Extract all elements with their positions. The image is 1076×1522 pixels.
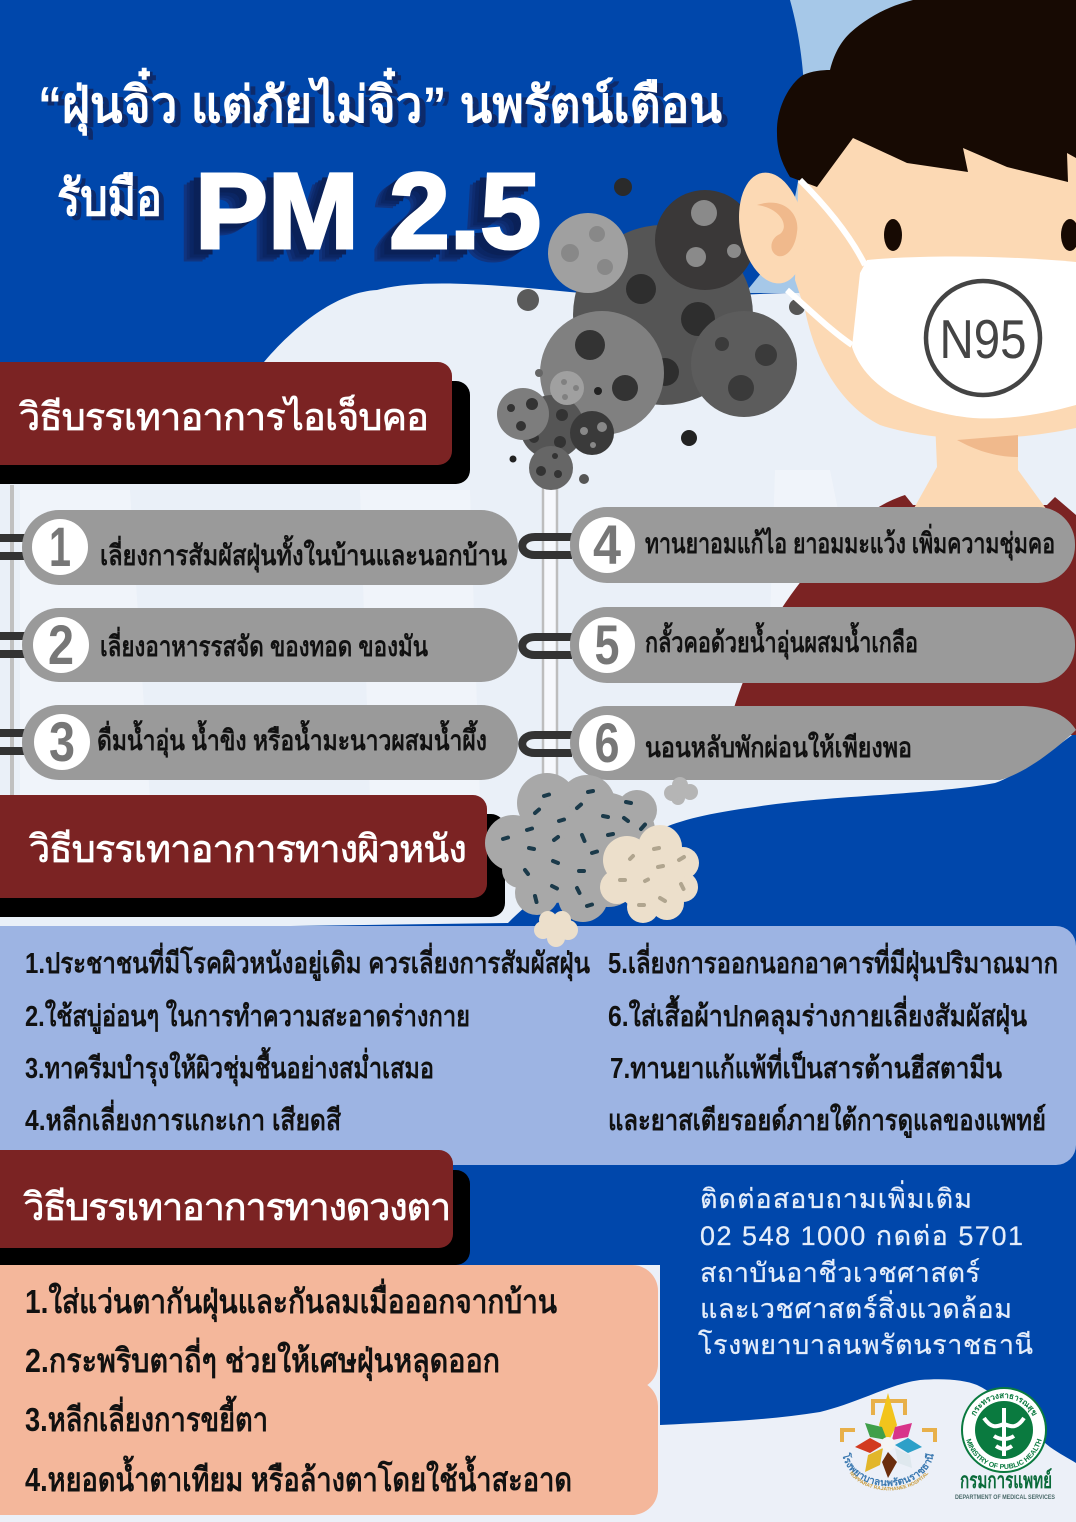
background: pale wave: [0, 284, 1076, 930]
title: “ฝุ่นจิ๋ว แต่ภัยไม่จิ๋ว” นพรัตน์เตือน: [44, 72, 728, 140]
small beige puff: [534, 911, 578, 947]
title: “ฝุ่นจิ๋ว แต่ภัยไม่จิ๋ว” นพรัตน์เตือน: [38, 68, 722, 136]
item 1: [22, 510, 518, 585]
gray dust cloud: [485, 773, 657, 922]
item 6: นอนหลับพักผ่อนให้เพียงพอ: [645, 731, 912, 763]
mask straps: [787, 180, 865, 345]
PM 2.5 heading: PM 2.5: [188, 155, 534, 276]
item 3: ดื่มน้ำอุ่น น้ำขิง หรือน้ำมะนาวผสมน้ำผึ้ง: [97, 719, 487, 758]
PM2.5 dust cluster: [497, 178, 805, 490]
background: blue strip beside third heading: [0, 1160, 680, 1265]
panel: skin symptoms: 4.หลีกเลี่ยงการแกะเกา เสียดสี: [25, 1099, 341, 1137]
face: [795, 130, 1076, 439]
heading: skin symptoms: [0, 795, 505, 917]
item 5: [570, 607, 1075, 683]
panel: eye symptoms: 1.ใส่แว่นตากันฝุ่นและกันลมเมื่อออกจากบ้าน: [25, 1278, 557, 1323]
item 4: 4: [593, 513, 621, 576]
item 1: เลี่ยงการสัมผัสฝุ่นทั้งในบ้านและนอกบ้าน: [100, 534, 507, 573]
PM 2.5 heading: PM 2.5: [184, 158, 530, 279]
background: soft light stripes: [20, 470, 860, 800]
chin shadow: [957, 435, 1018, 457]
person wearing N95 mask: [727, 0, 1076, 735]
binder rings: [0, 537, 572, 753]
item 2: [22, 608, 518, 682]
small gray puff: [664, 777, 698, 805]
contact information: และเวชศาสตร์สิ่งแวดล้อม: [700, 1290, 1012, 1324]
panel: eye symptoms: [0, 1265, 658, 1515]
skin dust clouds: [485, 773, 699, 947]
eyes: [884, 219, 1076, 251]
logo: Ministry of Public Health: MINISTRY OF PUBLIC HEALTH: [966, 1438, 1042, 1469]
panel: eye symptoms: 2.กระพริบตาถี่ๆ ช่วยให้เศษฝุ่นหลุดออก: [25, 1337, 500, 1382]
item 2: เลี่ยงอาหารรสจัด ของทอด ของมัน: [100, 626, 428, 662]
item 6: [570, 706, 1076, 780]
item 5: กลั้วคอด้วยน้ำอุ่นผสมน้ำเกลือ: [645, 621, 918, 660]
logo: Nopparat Rajathanee Hospital: NOPPARAT RAJATHANEE HOSPITAL: [850, 1471, 928, 1490]
logo: Nopparat Rajathanee Hospital: [840, 1393, 937, 1490]
PM 2.5 heading: PM 2.5: [181, 160, 527, 281]
mask: [852, 256, 1076, 418]
contact information: [698, 1180, 1033, 1360]
PM 2.5 heading: PM 2.5: [178, 162, 524, 283]
heading: cough and sore throat: วิธีบรรเทาอาการไอเจ็บคอ: [19, 394, 429, 439]
title: [38, 68, 728, 230]
panel: skin symptoms: 7.ทานยาแก้แพ้ที่เป็นสารต้านฮีสตามีน: [610, 1047, 1002, 1085]
N95 badge: N95: [940, 308, 1026, 370]
background: light blue corner: [745, 0, 1076, 293]
logo: Nopparat Rajathanee Hospital: โรงพยาบาลนพรัตนราชธานี: [842, 1452, 934, 1486]
item 5: 5: [594, 613, 620, 676]
title: รับมือ: [57, 170, 162, 226]
panel: skin symptoms: 2.ใช้สบู่อ่อนๆ ในการทำความสะอาดร่างกาย: [25, 999, 470, 1034]
heading: skin symptoms: วิธีบรรเทาอาการทางผิวหนัง: [29, 829, 467, 871]
PM 2.5 heading: PM 2.5: [195, 150, 541, 271]
item 1: 1: [49, 515, 71, 578]
panel: eye symptoms: 3.หลีกเลี่ยงการขยี้ตา: [25, 1395, 268, 1438]
hair: [777, 0, 1076, 187]
heading: cough and sore throat: [0, 362, 470, 484]
contact information: 02 548 1000 กดต่อ 5701: [700, 1221, 1023, 1251]
neck: [913, 420, 1047, 510]
list: sore throat remedies: [22, 507, 1076, 780]
panel: eye symptoms: 4.หยอดน้ำตาเทียม หรือล้างตาโดยใช้น้ำสะอาด: [25, 1455, 572, 1498]
ear: [731, 167, 813, 289]
item 6: 6: [594, 711, 620, 774]
item 3: 3: [49, 710, 75, 773]
logo: Ministry of Public Health: กระทรวงสาธารณสุข: [972, 1393, 1037, 1416]
title: รับมือ: [62, 174, 167, 230]
logo: Ministry of Public Health: [955, 1387, 1055, 1501]
item 2: 2: [48, 613, 74, 676]
shirt: [727, 495, 1076, 735]
heading: eye symptoms: [0, 1150, 470, 1265]
heading: eye symptoms: วิธีบรรเทาอาการทางดวงตา: [23, 1187, 451, 1229]
panel: skin symptoms: 1.ประชาชนที่มีโรคผิวหนังอยู่เดิม ควรเลี่ยงการสัมผัสฝุ่น: [25, 942, 590, 981]
N95 badge: [926, 281, 1040, 395]
beige dust cloud: [600, 825, 699, 923]
item 4: [570, 507, 1075, 583]
contact information: โรงพยาบาลนพรัตนราชธานี: [698, 1330, 1033, 1360]
contact information: ติดต่อสอบถามเพิ่มเติม: [700, 1180, 972, 1214]
contact information: สถาบันอาชีวเวชศาสตร์: [700, 1257, 980, 1288]
binder lines: [12, 470, 557, 797]
background: lower-left pale area: [0, 1250, 1076, 1522]
logo: Ministry of Public Health: DEPARTMENT OF MEDICAL SERVICES: [955, 1495, 1055, 1501]
panel: skin symptoms: 3.ทาครีมบำรุงให้ผิวชุ่มชื้นอย่างสม่ำเสมอ: [25, 1046, 434, 1086]
panel: skin symptoms: [0, 926, 1076, 1165]
item 3: [22, 705, 518, 780]
